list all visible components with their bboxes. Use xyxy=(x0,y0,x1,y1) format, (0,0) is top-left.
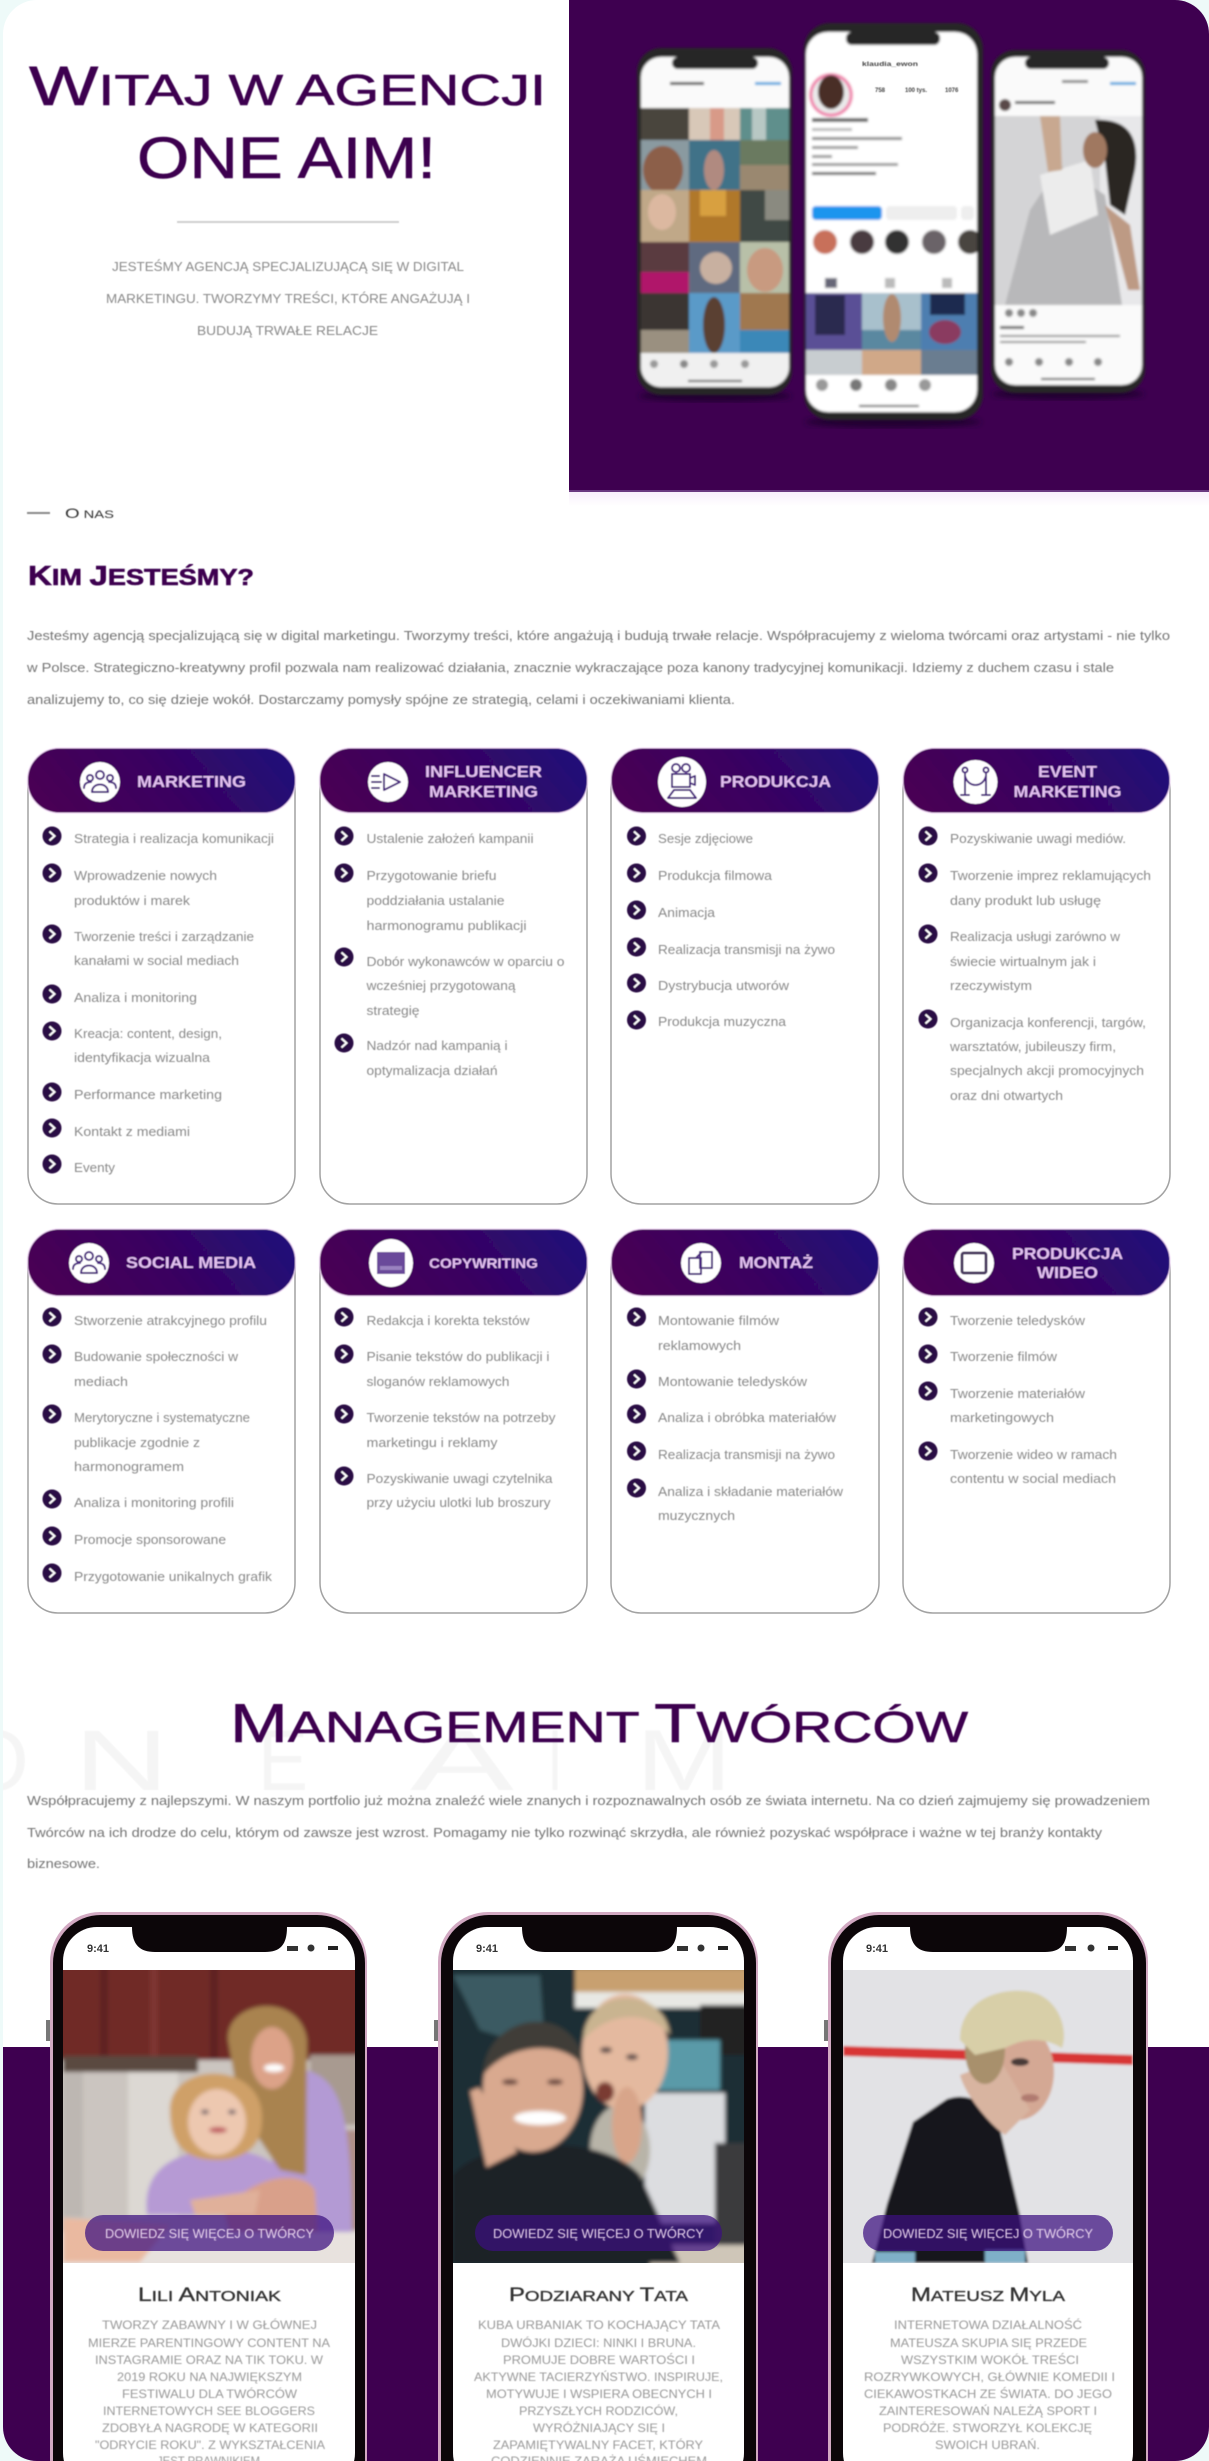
button xyxy=(475,2215,722,2251)
phone card: Mateusz Myla xyxy=(824,1912,1148,2461)
icon: megaphone xyxy=(368,762,408,802)
list: Influencer marketing services: Dobór wykonawców w oparciu o xyxy=(366,955,565,969)
panel: Produkcja xyxy=(611,748,879,1204)
list: Event marketing services: Realizacja usługi zarówno w xyxy=(950,930,1121,944)
list: Produkcja wideo services: Tworzenie materiałów xyxy=(950,1387,1086,1401)
heading: Kim jesteśmy: KIM JESTEŚMY? xyxy=(28,560,254,591)
list: Event marketing services: dany produkt lub usługę xyxy=(950,894,1101,908)
button xyxy=(85,2215,334,2251)
list: Marketing services: produktów i marek xyxy=(74,894,191,908)
bio: WYRÓŻNIAJĄCY SIĘ I xyxy=(533,2420,665,2435)
list: Marketing services: Tworzenie treści i zarządzanie xyxy=(74,930,254,944)
card header: Influencer marketing xyxy=(320,748,588,813)
bio: "ODRYCIE ROKU". Z WYKSZTAŁCENIA xyxy=(95,2438,325,2452)
card header: Event marketing: MARKETING xyxy=(1014,784,1122,801)
card header: Event marketing xyxy=(903,748,1170,813)
status bar xyxy=(866,1927,1118,1955)
list: Influencer marketing services: Przygotowanie briefu xyxy=(366,869,497,883)
list: Marketing services: Wprowadzenie nowych xyxy=(74,869,217,883)
phone profile labels: 758 xyxy=(875,88,886,94)
list: Event marketing services: warsztatów, jubileuszy firm, xyxy=(949,1040,1116,1054)
list: Event marketing services xyxy=(918,826,1151,1103)
text block: about paragraph: analizujemy to, co się dzieje wokół. Dostarczamy pomysły spójne ze strategią, celami i oczekiwaniami klienta. xyxy=(27,692,735,707)
list: Montaż services xyxy=(627,1308,844,1523)
text block: about paragraph xyxy=(26,628,1170,707)
phone mockup: centre, profile xyxy=(804,23,983,420)
card header: Event marketing: EVENT xyxy=(1038,764,1097,781)
phone profile labels: 100 tys. xyxy=(905,88,927,94)
list: Social media services: mediach xyxy=(74,1375,128,1389)
card header: Influencer marketing: INFLUENCER xyxy=(425,764,543,781)
list: Produkcja services: Animacja xyxy=(658,906,715,920)
phone profile labels: 1076 xyxy=(945,88,959,94)
hero description text xyxy=(106,259,470,338)
watermark: ONE AIM: E xyxy=(258,1713,308,1809)
list: Marketing services: Kontakt z mediami xyxy=(74,1125,190,1139)
name: M ATEUSZ M YLA xyxy=(911,2285,1065,2306)
list: Montaż services: Montowanie filmów xyxy=(658,1314,780,1328)
list: Event marketing services: Pozyskiwanie uwagi mediów. xyxy=(950,832,1126,846)
bio: 2019 ROKU NA NAJWIĘKSZYM xyxy=(117,2370,302,2384)
card header: Montaż xyxy=(611,1229,879,1296)
list: Influencer marketing services: harmonogramu publikacji xyxy=(366,919,526,933)
phone mockup: right, single post xyxy=(991,50,1145,393)
bio: CIEKAWOSTKACH ZE ŚWIATA. DO JEGO xyxy=(864,2386,1112,2401)
list: Marketing services: Kreacja: content, design, xyxy=(74,1027,222,1041)
text block: management paragraph xyxy=(27,1793,1150,1871)
bio: MOTYWUJE I WSPIERA OBECNYCH I xyxy=(486,2387,712,2401)
list: Copywriting services: Pozyskiwanie uwagi czytelnika xyxy=(366,1472,553,1486)
list: Social media services: Budowanie społeczności w xyxy=(74,1350,239,1364)
hero description text: MARKETINGU. TWORZYMY TREŚCI, KTÓRE ANGAŻUJĄ I xyxy=(106,291,470,306)
bio: ZAPAMIĘTYWALNY FACET, KTÓRY xyxy=(493,2437,703,2452)
watermark: ONE AIM: N xyxy=(74,1713,169,1809)
card header: Copywriting xyxy=(320,1229,588,1296)
panel: Social media xyxy=(28,1229,296,1613)
list: Event marketing services: Tworzenie imprez reklamujących xyxy=(950,869,1151,883)
title: Witaj w agencji One Aim: ONE AIM! xyxy=(137,126,436,191)
list: Produkcja services: Dystrybucja utworów xyxy=(658,979,790,993)
text block: about paragraph: w Polsce. Strategiczno-kreatywny profil pozwala nam realizować działania, znacznie wykraczające poza kanony tradycyjnej komunikacji. Idziemy z duchem czasu i stale xyxy=(26,660,1114,675)
list: Produkcja wideo services xyxy=(918,1308,1117,1486)
icon: video screen xyxy=(954,1243,994,1283)
list: Montaż services: Analiza i obróbka materiałów xyxy=(658,1411,837,1425)
list: Social media services: harmonogramem xyxy=(74,1460,184,1474)
name: LILI ANTONIAK xyxy=(138,2285,281,2306)
list: Event marketing services: oraz dni otwartych xyxy=(950,1089,1063,1103)
list: Social media services: Przygotowanie unikalnych grafik xyxy=(74,1570,273,1584)
button: DOWIEDZ SIĘ WIĘCEJ O TWÓRCY xyxy=(105,2226,315,2241)
bio: TWORZY ZABAWNY I W GŁÓWNEJ xyxy=(102,2317,317,2332)
panel: Event marketing xyxy=(903,748,1170,1204)
list: Social media services: publikacje zgodnie z xyxy=(74,1436,200,1450)
bio: PODRÓŻE. STWORZYŁ KOLEKCJĘ xyxy=(883,2420,1092,2435)
list: Copywriting services: przy użyciu ulotki lub broszury xyxy=(366,1496,551,1510)
button: DOWIEDZ SIĘ WIĘCEJ O TWÓRCY xyxy=(493,2226,705,2241)
icon: people xyxy=(80,762,120,802)
text block: management paragraph: Twórców na ich drodze do celu, którym od zawsze jest wzrost. Pomagamy nie tylko rozwinąć skrzydła, ale również pozyskać współprace i ważne w tej branży kontakty xyxy=(27,1825,1103,1840)
status bar: 9:41 xyxy=(87,1943,109,1955)
text block: about paragraph: Jesteśmy agencją specjalizującą się w digital marketingu. Tworzymy treści, które angażują i budują trwałe relacje. Współpracujemy z wieloma twórcami oraz artystami - nie tylko xyxy=(27,628,1170,643)
list: Montaż services: Montowanie teledysków xyxy=(658,1375,808,1389)
button xyxy=(863,2215,1113,2251)
bio: ZAINTERESOWAŃ NALEŻĄ SPORT I xyxy=(879,2403,1097,2418)
bio: AKTYWNE TACIERZYŃSTWO. INSPIRUJE, xyxy=(474,2369,723,2384)
bio: FESTIWALU DLA TWÓRCÓW xyxy=(122,2386,298,2401)
phone profile labels xyxy=(862,62,959,94)
heading: Management Twórców: M ANAGEMENT TWÓRCÓW xyxy=(230,1692,969,1754)
bio: KUBA URBANIAK TO KOCHAJĄCY TATA xyxy=(478,2318,720,2332)
card header: Produkcja wideo xyxy=(903,1229,1170,1296)
list: Event marketing services: rzeczywistym xyxy=(950,979,1032,993)
text block: management paragraph: biznesowe. xyxy=(27,1856,100,1871)
list: Influencer marketing services: Ustalenie założeń kampanii xyxy=(366,832,534,846)
status bar xyxy=(87,1927,338,1955)
hero description text: JESTEŚMY AGENCJĄ SPECJALIZUJĄCĄ SIĘ W DIGITAL xyxy=(112,259,464,274)
list: Event marketing services: specjalnych akcji promocyjnych xyxy=(950,1064,1144,1078)
card header: Produkcja wideo: PRODUKCJA xyxy=(1012,1246,1123,1263)
watermark: ONE AIM: I xyxy=(548,1713,562,1809)
bio: INTERNETOWYCH SEE BLOGGERS xyxy=(103,2404,315,2418)
list: Influencer marketing services: strategię xyxy=(366,1004,420,1018)
list: Copywriting services xyxy=(334,1308,556,1510)
list: Montaż services: Realizacja transmisji na żywo xyxy=(658,1448,835,1462)
list: Influencer marketing services: Nadzór nad kampanią i xyxy=(366,1039,508,1053)
icon: film camera xyxy=(658,757,706,807)
title: Witaj w agencji One Aim: W ITAJ W AGENCJI xyxy=(29,54,546,117)
card header: Marketing: MARKETING xyxy=(137,774,246,791)
list: Marketing services: Performance marketing xyxy=(74,1088,222,1102)
card header: Social media xyxy=(28,1229,296,1296)
bio: ZDOBYŁA NAGRODĘ W KATEGORII xyxy=(102,2421,318,2435)
list: Montaż services: reklamowych xyxy=(658,1339,741,1353)
list: Produkcja wideo services: Tworzenie filmów xyxy=(950,1350,1058,1364)
card header: Produkcja: PRODUKCJA xyxy=(720,774,831,791)
list: Social media services xyxy=(42,1308,273,1584)
bio: WSZYSTKIM WOKÓŁ TREŚCI xyxy=(901,2352,1079,2367)
watermark: ONE AIM: A xyxy=(410,1713,515,1809)
bio: PRZYSZŁYCH RODZICÓW, xyxy=(519,2403,678,2418)
list: Social media services: Promocje sponsorowane xyxy=(74,1533,226,1547)
list: Produkcja wideo services: Tworzenie teledysków xyxy=(950,1314,1086,1328)
list: Copywriting services: sloganów reklamowych xyxy=(366,1375,510,1389)
list: Produkcja services: Produkcja muzyczna xyxy=(658,1015,786,1029)
icon: frames xyxy=(681,1243,721,1283)
status bar xyxy=(476,1927,728,1955)
list: Marketing services: Strategia i realizacja komunikacji xyxy=(74,832,274,846)
photo: father with child xyxy=(445,1960,755,2270)
photo: Mateusz xyxy=(835,1965,1145,2270)
phone mockup: left, photo grid xyxy=(637,48,792,395)
list: Influencer marketing services: wcześniej przygotowaną xyxy=(365,979,516,993)
list: Produkcja services: Realizacja transmisji na żywo xyxy=(658,943,835,957)
name: PODZIARANY TATA xyxy=(509,2285,688,2306)
list: Event marketing services: Organizacja konferencji, targów, xyxy=(950,1016,1146,1030)
phone card: Podziarany Tata xyxy=(434,1912,758,2461)
purple band behind creator phones xyxy=(3,2047,1209,2461)
photo: Lili with mother xyxy=(55,1960,365,2272)
watermark: ONE AIM xyxy=(0,1713,732,1809)
list: Marketing services: identyfikacja wizualna xyxy=(74,1051,210,1065)
title: Witaj w agencji One Aim xyxy=(28,66,542,180)
panel: Influencer marketing xyxy=(320,748,588,1204)
list: Produkcja wideo services: contentu w social mediach xyxy=(950,1472,1116,1486)
card header: Produkcja xyxy=(611,748,879,813)
icon: rope barrier xyxy=(954,760,998,804)
icon: people xyxy=(69,1243,109,1283)
list: Marketing services xyxy=(42,826,274,1175)
list: Produkcja wideo services: marketingowych xyxy=(950,1411,1054,1425)
status bar: 9:41 xyxy=(866,1943,888,1955)
card header: Montaż: MONTAŻ xyxy=(739,1254,813,1272)
bio: PROMUJE DOBRE WARTOŚCI I xyxy=(503,2352,695,2367)
panel: Copywriting xyxy=(320,1229,588,1613)
list: Copywriting services: marketingu i reklamy xyxy=(366,1436,498,1450)
watermark: ONE AIM: M xyxy=(636,1713,732,1809)
list: Marketing services: kanałami w social mediach xyxy=(74,954,239,968)
list: Social media services: Merytoryczne i systematyczne xyxy=(74,1411,250,1425)
list: Social media services: Analiza i monitoring profili xyxy=(74,1496,234,1510)
bio: INTERNETOWA DZIAŁALNOŚĆ xyxy=(894,2317,1082,2332)
status bar: 9:41 xyxy=(476,1943,498,1955)
panel: Produkcja wideo xyxy=(903,1229,1170,1613)
list: Event marketing services: świecie wirtualnym jak i xyxy=(950,955,1096,969)
list: Influencer marketing services: optymalizacja działań xyxy=(366,1064,498,1078)
list: Marketing services: Analiza i monitoring xyxy=(74,991,197,1005)
list: Influencer marketing services xyxy=(334,826,565,1078)
hero panel: intro text xyxy=(29,54,546,338)
list: Copywriting services: Pisanie tekstów do publikacji i xyxy=(366,1350,550,1364)
list: Produkcja services: Produkcja filmowa xyxy=(658,869,772,883)
phone profile labels: klaudia_ewon xyxy=(862,62,918,68)
list: Social media services: Stworzenie atrakcyjnego profilu xyxy=(74,1314,267,1328)
phone card: Lili Antoniak xyxy=(46,1912,367,2461)
bio: INSTAGRAMIE ORAZ NA TIK TOKU. W xyxy=(95,2353,324,2367)
bio xyxy=(864,2317,1115,2452)
bio xyxy=(88,2317,330,2461)
card header: Marketing xyxy=(28,748,296,813)
bio: ROZRYWKOWYCH, GŁÓWNIE KOMEDII I xyxy=(864,2369,1115,2384)
hero description text: BUDUJĄ TRWAŁE RELACJE xyxy=(197,323,378,338)
button: DOWIEDZ SIĘ WIĘCEJ O TWÓRCY xyxy=(883,2226,1094,2241)
list: Influencer marketing services: poddziałania ustalanie xyxy=(366,894,505,908)
card header: Copywriting: COPYWRITING xyxy=(429,1255,538,1271)
panel: Montaż xyxy=(611,1229,879,1613)
bio xyxy=(474,2318,723,2461)
list: Copywriting services: Redakcja i korekta tekstów xyxy=(366,1314,531,1328)
list: Produkcja services: Sesje zdjęciowe xyxy=(658,832,753,846)
bio: SWOICH UBRAŃ. xyxy=(935,2437,1040,2452)
list: Produkcja wideo services: Tworzenie wideo w ramach xyxy=(950,1448,1117,1462)
bio: MATEUSZA SKUPIA SIĘ PRZEDE xyxy=(890,2336,1087,2350)
list: Marketing services: Eventy xyxy=(74,1161,116,1175)
icon: text block xyxy=(369,1239,413,1287)
list: Montaż services: muzycznych xyxy=(658,1509,735,1523)
panel: Marketing xyxy=(28,748,296,1204)
list: Montaż services: Analiza i składanie materiałów xyxy=(658,1485,844,1499)
section label: O nas: O NAS xyxy=(65,505,114,521)
list: Copywriting services: Tworzenie tekstów na potrzeby xyxy=(366,1411,556,1425)
list: Produkcja services xyxy=(627,826,835,1030)
card header: Produkcja wideo: WIDEO xyxy=(1037,1265,1098,1282)
hero panel: purple background with three phones xyxy=(569,0,1209,506)
bio: MIERZE PARENTINGOWY CONTENT NA xyxy=(88,2336,330,2350)
bio: DWÓJKI DZIECI: NINKI I BRUNA. xyxy=(501,2335,696,2350)
text block: management paragraph: Współpracujemy z najlepszymi. W naszym portfolio już można znaleźć wiele znanych i rozpoznawalnych osób ze świata internetu. Na co dzień zajmujemy się prowadzeniem xyxy=(27,1793,1150,1808)
section label: O nas xyxy=(26,508,114,519)
card header: Social media: SOCIAL MEDIA xyxy=(126,1255,256,1272)
card header: Influencer marketing: MARKETING xyxy=(429,784,538,801)
